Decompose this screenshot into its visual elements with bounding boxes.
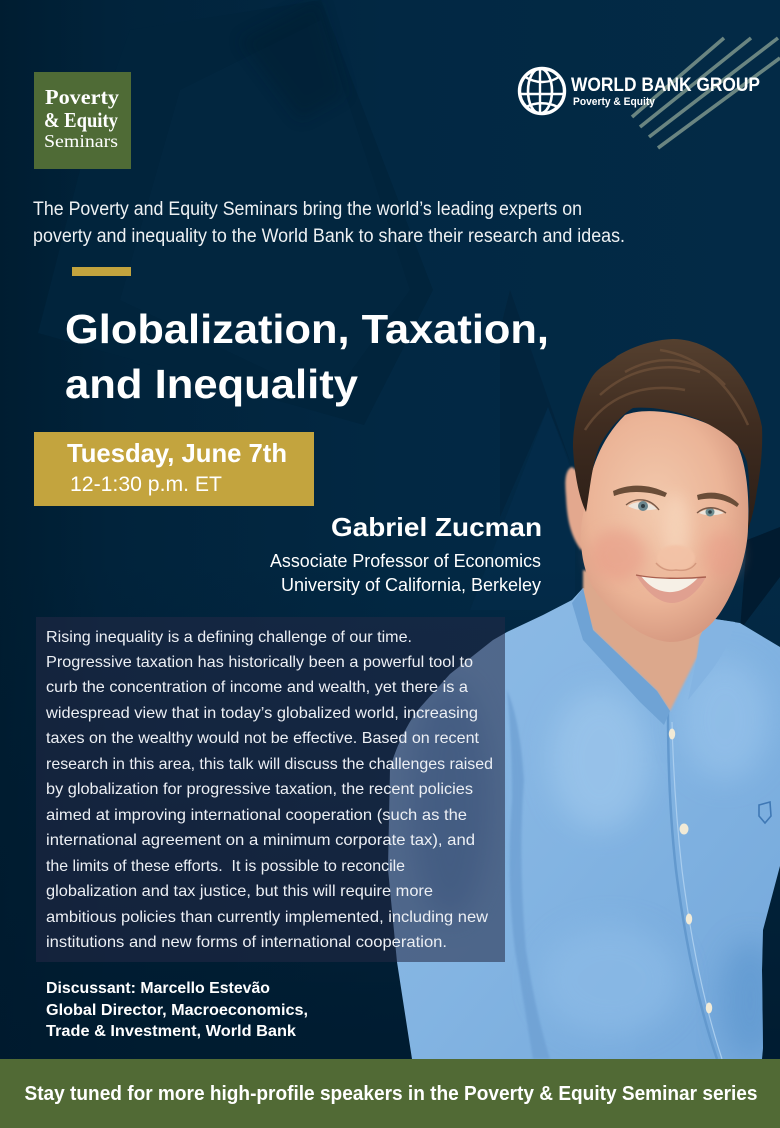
abstract text: Rising inequality is a defining challenge of our time.: [46, 629, 412, 646]
badge text: & Equity: [44, 108, 118, 132]
badge text: [44, 85, 120, 151]
speaker: [270, 512, 542, 595]
logo: World Bank Group: WORLD BANK GROUP: [571, 75, 760, 96]
intro text: The Poverty and Equity Seminars bring the world’s leading experts on: [33, 199, 582, 220]
title: [65, 306, 549, 407]
series badge: [34, 72, 131, 169]
abstract text: aimed at improving international cooperation (such as the: [46, 807, 467, 824]
speaker: Gabriel Zucman: [331, 512, 542, 542]
chest logo: [759, 802, 771, 823]
intro text: poverty and inequality to the World Bank to share their research and ideas.: [33, 226, 625, 247]
abstract text: curb the concentration of income and wealth, yet there is a: [46, 679, 468, 696]
panel: abstract: [36, 617, 505, 962]
collar: [572, 588, 670, 725]
abstract text: ambitious policies than currently implemented, including new: [46, 909, 488, 926]
footer banner: Stay tuned for more high-profile speakers in the Poverty & Equity Seminar series: [24, 1083, 758, 1105]
abstract text: international agreement on a minimum corporate tax), and: [46, 832, 475, 849]
intro text: [33, 199, 625, 247]
neck: [583, 570, 722, 711]
speaker: University of California, Berkeley: [281, 575, 541, 595]
shirt: [388, 588, 780, 1059]
date box: 12-1:30 p.m. ET: [70, 473, 222, 496]
footer banner: [0, 1059, 780, 1128]
abstract text: the limits of these efforts. It is possible to reconcile: [46, 858, 405, 875]
shirt shading: [410, 660, 780, 1060]
face: [581, 411, 748, 642]
speaker: Associate Professor of Economics: [270, 551, 541, 571]
decorative stripes: [632, 38, 780, 148]
badge text: Seminars: [44, 131, 118, 151]
discussant: Global Director, Macroeconomics,: [46, 1002, 308, 1019]
gold accent bar: [72, 267, 131, 276]
abstract text: widespread view that in today’s globalized world, increasing: [45, 705, 478, 722]
title: and Inequality: [65, 361, 358, 407]
date box: [34, 432, 314, 506]
eyes: [626, 500, 726, 516]
badge text: Poverty: [45, 85, 120, 109]
abstract text: taxes on the wealthy would not be effective. Based on recent: [46, 730, 480, 747]
icon: globe: [520, 68, 564, 114]
logo: World Bank Group: Poverty & Equity: [573, 96, 656, 108]
discussant: [46, 980, 308, 1040]
ear: [565, 467, 592, 550]
shirt buttons: [669, 728, 712, 1014]
abstract text: research in this area, this talk will discuss the challenges raised: [46, 756, 493, 773]
abstract text: globalization and tax justice, but this will require more: [46, 883, 433, 900]
discussant: Discussant: Marcello Estevão: [46, 980, 270, 997]
title: Globalization, Taxation,: [65, 306, 549, 352]
mouth: [636, 575, 706, 603]
photo: speaker portrait: [388, 339, 780, 1060]
abstract text: [45, 629, 493, 951]
discussant: Trade & Investment, World Bank: [46, 1023, 296, 1040]
abstract text: Progressive taxation has historically been a powerful tool to: [46, 654, 473, 671]
cheek shading: [590, 494, 740, 581]
abstract text: institutions and new forms of international cooperation.: [46, 934, 447, 951]
abstract text: by globalization for progressive taxation, the recent policies: [46, 781, 473, 798]
eyebrows: [613, 486, 739, 507]
hair strands: [585, 350, 748, 430]
logo: World Bank Group: [520, 68, 760, 114]
date box: Tuesday, June 7th: [67, 438, 287, 468]
hair: [573, 339, 762, 530]
